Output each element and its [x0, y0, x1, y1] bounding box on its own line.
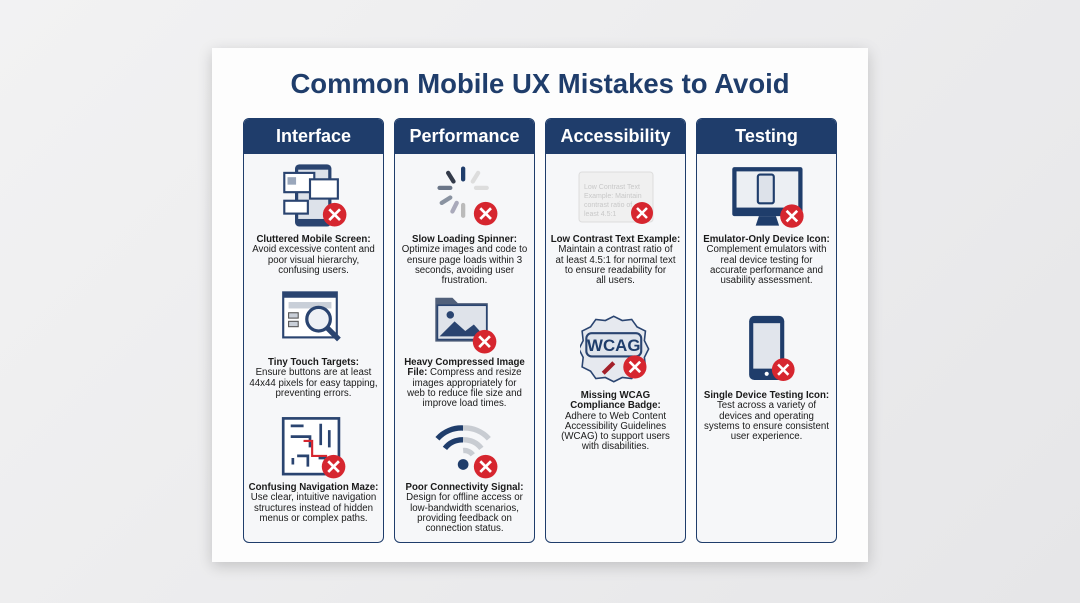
text: wifi — [406, 482, 523, 534]
icon: spinner — [437, 166, 498, 226]
text: low contrast: at least 4.5:1 for normal text — [555, 255, 676, 266]
text: maze: menus or complex paths. — [259, 513, 368, 524]
text: low contrast — [551, 234, 680, 286]
heading: performance: Performance — [409, 126, 520, 146]
text: emulator: Emulator-Only Device Icon: — [703, 234, 830, 245]
text: maze: Use clear, intuitive navigation — [251, 492, 376, 503]
icon: low contrast: contrast ratio of — [584, 202, 632, 209]
text: wifi: Poor Connectivity Signal: — [406, 482, 523, 493]
text: cluttered: poor visual hierarchy, — [268, 255, 359, 266]
text: WCAG: (WCAG) to support users — [561, 431, 670, 442]
text: image file: File: Compress and resize — [407, 367, 522, 378]
text: touch targets: 44x44 pixels for easy tapping, — [249, 378, 378, 389]
icon: maze — [282, 417, 346, 478]
heading: testing — [697, 119, 836, 154]
text: WCAG: Accessibility Guidelines — [565, 421, 666, 432]
icon: WCAG badge: WCAG — [587, 336, 640, 355]
title: Common Mobile UX Mistakes to Avoid — [290, 68, 790, 99]
text: touch targets — [249, 357, 378, 399]
text: single device: Single Device Testing Icon: — [704, 390, 829, 401]
icon: low contrast: Low Contrast Text — [584, 184, 640, 191]
text: spinner: ensure page loads within 3 — [407, 255, 522, 266]
text: low contrast: Maintain a contrast ratio of — [558, 244, 673, 255]
icon: cluttered screen — [283, 164, 346, 226]
text: maze: Confusing Navigation Maze: — [249, 482, 378, 493]
text: touch targets: Ensure buttons are at least — [256, 367, 371, 378]
text: cluttered: Avoid excessive content and — [252, 244, 375, 255]
heading: interface — [244, 119, 383, 154]
icon: low contrast: least 4.5:1 — [584, 211, 616, 218]
text: spinner: Slow Loading Spinner: — [412, 234, 517, 245]
text: single device: systems to ensure consistent — [704, 421, 829, 432]
text: touch targets: Tiny Touch Targets: — [268, 357, 359, 368]
text: single device: Test across a variety of — [717, 400, 816, 411]
text: maze: structures instead of hidden — [254, 503, 373, 514]
text: WCAG: Missing WCAG — [581, 390, 650, 401]
text: touch targets: preventing errors. — [276, 388, 351, 399]
text: spinner — [402, 234, 527, 286]
text: spinner: frustration. — [442, 275, 487, 286]
text: wifi: providing feedback on — [417, 513, 512, 524]
text: image file: Heavy Compressed Image — [404, 357, 525, 368]
text: emulator: Complement emulators with — [706, 244, 827, 255]
text: wifi: connection status. — [425, 523, 504, 534]
text: single device — [704, 390, 829, 442]
text: cluttered: confusing users. — [278, 265, 349, 276]
icon: low contrast — [578, 172, 654, 224]
text: low contrast: to ensure readability for — [565, 265, 666, 276]
panel: testing — [696, 118, 837, 543]
icon: single phone — [749, 316, 795, 381]
icon: wifi — [436, 425, 498, 478]
text: low contrast: all users. — [596, 275, 635, 286]
text: single device: user experience. — [731, 431, 802, 442]
text: low contrast: Low Contrast Text Example: — [551, 234, 680, 245]
card — [212, 48, 868, 562]
text: image file — [404, 357, 525, 409]
heading: interface: Interface — [276, 126, 351, 146]
heading: testing: Testing — [735, 126, 798, 146]
text: maze — [249, 482, 378, 524]
text: emulator: usability assessment. — [720, 275, 813, 286]
text: image file: improve load times. — [422, 398, 506, 409]
text: cluttered: Cluttered Mobile Screen: — [256, 234, 371, 245]
heading: accessibility: Accessibility — [560, 126, 671, 146]
panel: accessibility — [545, 118, 686, 543]
panel: interface — [243, 118, 384, 543]
heading: accessibility — [546, 119, 685, 154]
icon: low contrast: Example: Maintain — [584, 193, 642, 200]
text: single device: devices and operating — [719, 411, 814, 422]
text: emulator — [703, 234, 830, 286]
icon: touch targets — [282, 291, 341, 342]
text: spinner: seconds, avoiding user — [415, 265, 514, 276]
icon: emulator monitor — [732, 167, 804, 228]
icon: WCAG badge — [580, 315, 650, 383]
text: image file: web to reduce file size and — [407, 388, 522, 399]
heading: performance — [395, 119, 534, 154]
text: WCAG — [561, 390, 670, 452]
text: WCAG: Compliance Badge: — [570, 400, 661, 411]
text: cluttered — [252, 234, 375, 276]
panel: performance — [394, 118, 535, 543]
icon: image file — [435, 298, 496, 354]
text: WCAG: Adhere to Web Content — [565, 411, 666, 422]
text: emulator: accurate performance and — [710, 265, 823, 276]
text: spinner: Optimize images and code to — [402, 244, 527, 255]
text: emulator: real device testing for — [720, 255, 813, 266]
text: wifi: Design for offline access or — [406, 492, 523, 503]
text: WCAG: with disabilities. — [582, 441, 649, 452]
text: image file: images appropriately for — [413, 378, 516, 389]
text: wifi: low-bandwidth scenarios, — [410, 503, 519, 514]
